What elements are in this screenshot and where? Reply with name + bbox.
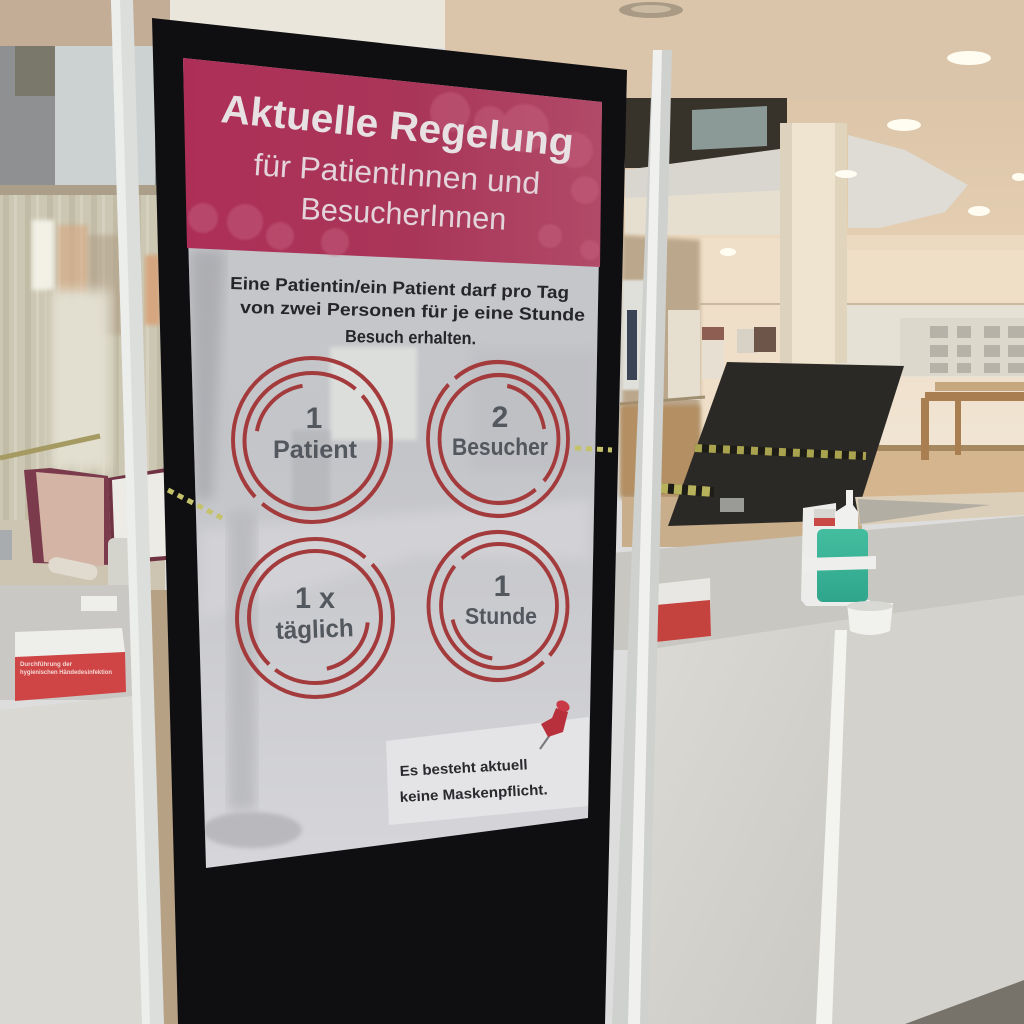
lobby background on the right	[160, 0, 1024, 547]
intro text	[230, 273, 586, 348]
red header band	[183, 58, 602, 267]
sign kiosk body	[152, 18, 627, 1024]
circle: 1 x täglich	[237, 539, 393, 697]
left counter with leaflet: hygienischen Händedesinfektion	[20, 669, 112, 676]
mask note	[386, 717, 589, 825]
folder display on the left	[0, 468, 166, 588]
reflected barrier tape	[168, 448, 612, 518]
reflection on the screen	[190, 250, 598, 848]
circle: 1 Patient: 1	[306, 402, 322, 435]
circle: 1 Stunde: 1	[494, 570, 510, 603]
left counter with leaflet	[0, 585, 146, 1024]
intro text: Besuch erhalten.	[345, 326, 476, 348]
leaflet holder on the counter	[656, 578, 711, 642]
subtitle	[253, 147, 541, 237]
circle: 2 Besucher: 2	[492, 401, 508, 434]
left counter with leaflet: Durchführung der	[20, 661, 72, 668]
left lobby reflection and curtains	[0, 0, 180, 1024]
notice board on the far wall	[702, 318, 1024, 379]
screen	[183, 58, 602, 868]
pillar	[780, 123, 847, 363]
intro text: Eine Patientin/ein Patient darf pro Tag	[230, 273, 569, 302]
circle: 1 Stunde: Stunde	[465, 603, 537, 629]
circle: 1 Stunde	[429, 532, 567, 680]
circle: 2 Besucher: Besucher	[452, 434, 548, 461]
subtitle: BesucherInnen	[300, 191, 507, 237]
intro text: von zwei Personen für je eine Stunde	[240, 297, 586, 325]
circle: 2 Besucher	[428, 362, 568, 516]
ceiling lights	[619, 2, 1024, 256]
wooden table	[921, 382, 1024, 460]
mask note: Es besteht aktuell	[399, 757, 528, 780]
hand sanitizer dispenser	[801, 490, 893, 1024]
subtitle: für PatientInnen und	[253, 147, 541, 201]
circle: 1 Patient: Patient	[273, 436, 358, 464]
title: Aktuelle Regelung	[219, 87, 576, 166]
circle: 1 x täglich: täglich	[275, 614, 354, 645]
dark monitor behind the glass	[660, 362, 904, 526]
glass door frames	[111, 0, 672, 1024]
reception counter	[612, 492, 1024, 1024]
icon: red push pin	[540, 698, 572, 749]
mask note: keine Maskenpflicht.	[399, 782, 548, 806]
circle: 1 Patient	[233, 358, 391, 522]
circle: 1 x täglich: 1 x	[295, 582, 335, 615]
